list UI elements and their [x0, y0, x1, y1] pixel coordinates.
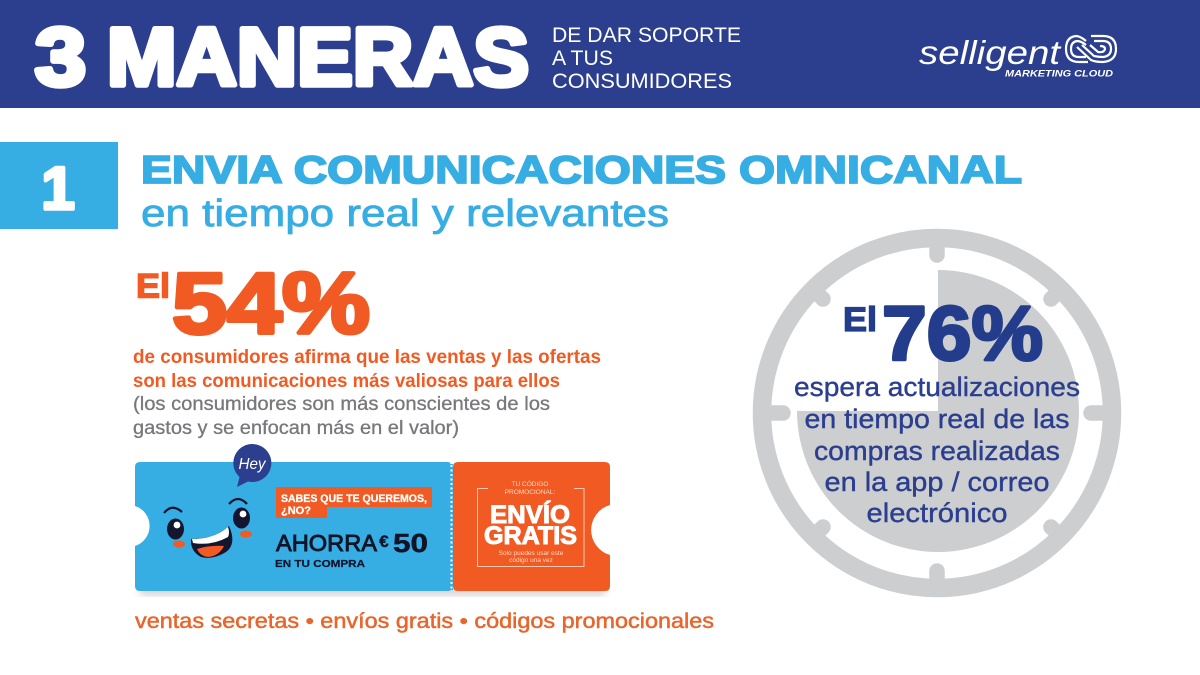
message tag: SABES QUE TE QUEREMOS,: [281, 493, 427, 505]
text block: real-time updates: compras realizadas: [814, 436, 1060, 466]
message tag: ¿NO?: [281, 505, 311, 517]
clock ticks: [764, 240, 1110, 586]
benefits list: ventas secretas • envíos gratis • códigos promocionales: [135, 610, 714, 633]
section heading: [141, 149, 1022, 235]
text block: real-time updates: electrónico: [866, 498, 1008, 528]
coupon right: orange ticket: TU CÓDIGO: [512, 479, 548, 488]
title: 3 MANERAS: 3: [35, 12, 86, 103]
speech bubble: Hey: Hey: [238, 456, 266, 473]
savings text: [275, 528, 428, 570]
text block: real-time updates: en tiempo real de las: [804, 404, 1070, 434]
stat: 54%: 54%: [172, 256, 370, 352]
text block: real-time updates: espera actualizaciones: [794, 372, 1080, 402]
subtitle: A TUS: [552, 47, 613, 70]
text block: consumers statement: gastos y se enfocan más en el valor): [133, 418, 459, 439]
coupon right: orange ticket: ENVÍO: [490, 500, 570, 529]
logo: selligent marketing cloud: selligent: [919, 34, 1062, 71]
text block: consumers statement: son las comunicaciones más valiosas para ellos: [133, 371, 560, 392]
text block: real-time updates: [794, 372, 1080, 528]
text block: consumers statement: de consumidores afirma que las ventas y las ofertas: [133, 347, 601, 368]
coupon right: orange ticket: PROMOCIONAL:: [505, 489, 555, 496]
pie slice: 75 percent: [797, 270, 1079, 552]
message tag: [276, 487, 432, 518]
section heading: ENVIA COMUNICACIONES OMNICANAL: [141, 149, 1022, 192]
coupon right: orange ticket: código una vez: [509, 557, 553, 564]
section number badge: [0, 142, 118, 229]
subtitle: [552, 24, 741, 93]
logo: selligent marketing cloud: MARKETING CLOUD: [1005, 68, 1113, 80]
savings text: 50: [393, 528, 428, 558]
savings text: €: [379, 532, 389, 551]
speech bubble: Hey: [233, 444, 271, 487]
subtitle: DE DAR SOPORTE: [552, 24, 741, 47]
savings text: EN TU COMPRA: [275, 559, 365, 570]
coupon: [135, 444, 610, 595]
stat: 76%: El: [843, 301, 877, 339]
subtitle: CONSUMIDORES: [552, 70, 732, 93]
perforation: [450, 465, 452, 590]
coupon right: orange ticket: GRATIS: [484, 522, 577, 550]
section heading: en tiempo real y relevantes: [141, 193, 669, 235]
stat: 54%: El: [136, 268, 170, 306]
chart: 76% clock pie: [762, 238, 1112, 588]
text block: real-time updates: en la app / correo: [824, 467, 1050, 497]
text block: consumers statement: (los consumidores son más conscientes de los: [133, 394, 550, 415]
icon: smiling face: [164, 499, 252, 558]
text block: consumers statement: [133, 347, 601, 439]
section number badge: 1: [41, 155, 75, 222]
coupon left: blue ticket: [135, 444, 453, 591]
title: 3 MANERAS: MANERAS: [107, 12, 529, 103]
coupon right: orange ticket: [453, 462, 610, 591]
logo: selligent marketing cloud: [919, 34, 1116, 80]
savings text: AHORRA: [276, 530, 377, 556]
stat: 76%: 76%: [882, 291, 1043, 377]
coupon right: orange ticket: Solo puedes usar este: [499, 550, 564, 557]
header banner: [0, 0, 1200, 108]
